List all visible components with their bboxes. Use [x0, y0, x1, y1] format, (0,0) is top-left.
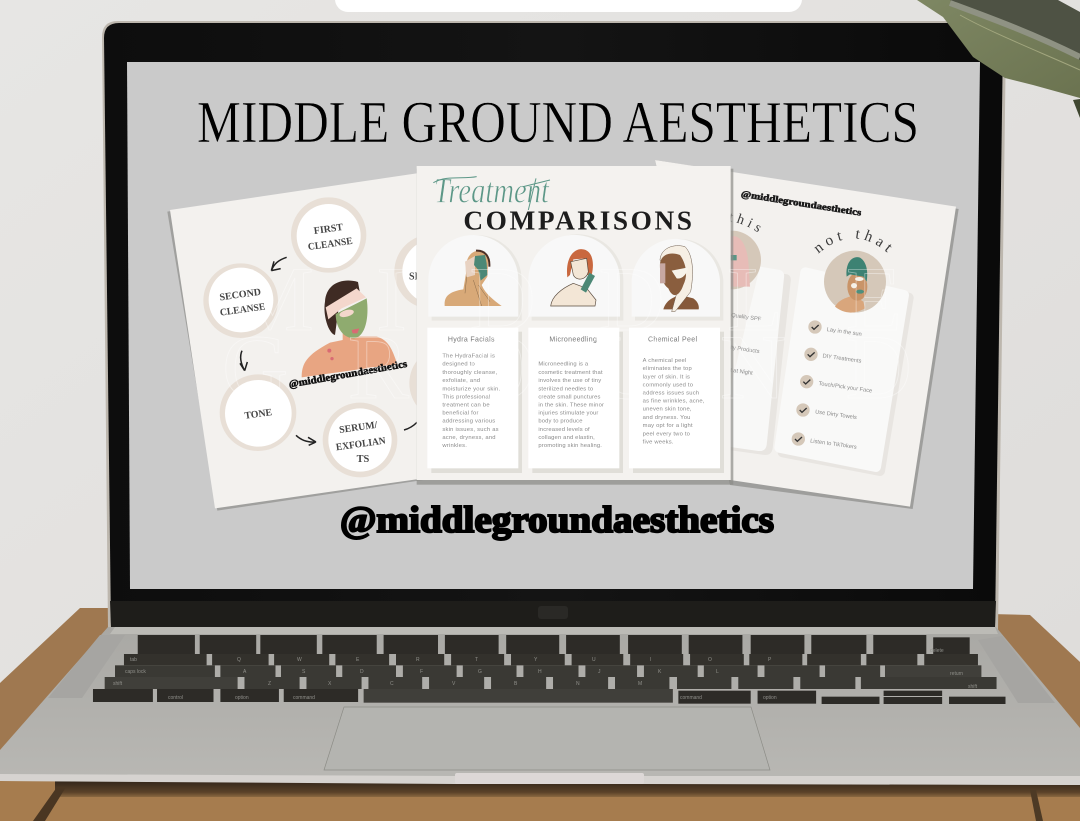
key labels: delete [930, 648, 944, 654]
text panel: microneedling: in the skin. These minor [538, 402, 604, 408]
text panel: chemical peel [629, 328, 724, 473]
laptop lid and bezel [102, 21, 1006, 630]
step: serum / exfoliants: TS [357, 454, 370, 465]
avatar: not that [824, 251, 886, 313]
key labels: T [475, 657, 478, 663]
text panel: chemical peel: may opt for a light [643, 423, 693, 429]
panel: right this-not-that card [655, 160, 959, 509]
panel: middle treatment comparisons card [417, 166, 733, 485]
plant leaf [917, 0, 1080, 118]
step: first cleanse [291, 197, 366, 273]
script heading: Treatment: Treatment [434, 171, 550, 211]
text panel: microneedling: increased levels of [538, 427, 590, 433]
text panel: chemical peel: eliminates the top [643, 366, 692, 372]
key labels: Z [268, 681, 271, 687]
check item: tiktokers: Listen to TikTokers [810, 438, 857, 451]
heading: not that: not that [814, 229, 892, 254]
text panel: chemical peel: peel every two to [643, 431, 690, 437]
text panel: microneedling: involves the use of tiny [538, 378, 601, 384]
text panel: microneedling [528, 328, 623, 473]
key labels: option [235, 695, 249, 701]
watermark: MIDDLE [232, 248, 902, 350]
white pill at top edge [335, 0, 802, 12]
handle on right card: @middlegroundaesthetics [740, 190, 862, 219]
keyboard [93, 635, 1006, 704]
thumb notch [455, 773, 644, 784]
key labels: shift [113, 681, 123, 687]
key labels: P [768, 657, 772, 663]
text panel: microneedling: cosmetic treatment that [538, 370, 603, 376]
text panel: chemical peel: layer of skin. It is [643, 374, 690, 380]
text panel: chemical peel: Chemical Peel [648, 336, 697, 343]
text panel: microneedling: body to produce [538, 419, 583, 425]
text panel: hydra facials: addressing various [442, 419, 495, 425]
step: tone: TONE [244, 407, 273, 422]
key labels: O [708, 657, 712, 663]
arrow: tone to serum [296, 435, 316, 445]
text panel: hydra facials: beneficial for [442, 411, 479, 417]
key labels: return [950, 671, 963, 677]
key labels: option [763, 695, 777, 701]
text panel: microneedling: Microneedling [549, 336, 597, 343]
key labels: L [716, 669, 719, 675]
key labels: J [598, 669, 601, 675]
title: MIDDLE GROUND AESTHETICS [197, 89, 919, 155]
text panel: hydra facials [427, 328, 522, 473]
text panel: microneedling: sterilized needles to [538, 386, 593, 392]
arrow: serum onward [404, 422, 417, 430]
key labels: U [592, 657, 596, 663]
text panel: hydra facials: skin issues, such as [442, 427, 499, 433]
step: first cleanse: CLEANSE [307, 236, 354, 253]
key labels: Y [534, 657, 538, 663]
key labels: K [658, 669, 662, 675]
key labels: shift [968, 684, 978, 690]
labels in this list: Quality SPF [731, 313, 762, 323]
trackpad [324, 707, 770, 770]
laptop base [0, 627, 1080, 785]
key labels: W [297, 657, 302, 663]
check item: DIY treatments: DIY Treatments [822, 353, 862, 365]
step: partly hidden lower circle [409, 346, 484, 421]
text panel: hydra facials: The HydraFacial is [442, 354, 495, 360]
social handle: @middlegroundaesthetics [340, 500, 774, 541]
text panel: microneedling: Microneedling is a [538, 362, 589, 368]
text panel: chemical peel: commonly used to [643, 382, 693, 388]
key labels: S [302, 669, 306, 675]
front edge [0, 774, 1080, 785]
icon: laptop logo mark [538, 606, 568, 619]
check item: touch face: Touch/Pick your Face [818, 381, 872, 395]
text panel: hydra facials: exfoliate, and [442, 378, 480, 384]
key labels: control [168, 695, 183, 701]
text panel: hydra facials: treatment can be [442, 402, 490, 408]
text panel: chemical peel: uneven skin tone, [643, 407, 692, 413]
avatar: this [702, 231, 761, 289]
key labels: D [360, 669, 364, 675]
text panel: chemical peel: as fine wrinkles, acne, [643, 399, 705, 405]
arch: chemical peel [632, 239, 723, 321]
key labels: R [416, 657, 420, 663]
step: first cleanse: FIRST [313, 222, 344, 237]
key labels: C [390, 681, 394, 687]
text panel: microneedling: collagen and elastin, [538, 435, 595, 441]
key labels [113, 648, 978, 701]
watermark: GROUND [222, 316, 912, 418]
key labels: E [356, 657, 360, 663]
key labels: H [538, 669, 542, 675]
step: serum / exfoliants: SERUM/ [339, 420, 378, 436]
text panel: microneedling: promoting skin healing. [538, 443, 602, 449]
text panel: chemical peel: address issues such [643, 391, 699, 397]
step: serum / exfoliants [323, 403, 397, 477]
arch: microneedling [528, 234, 623, 321]
text panel: chemical peel: A chemical peel [643, 358, 686, 364]
illustration: woman in green face mask [302, 281, 397, 377]
text panel: hydra facials: acne, dryness, and [442, 435, 496, 441]
step: second cleanse: SECOND [219, 287, 262, 303]
key labels: I [650, 657, 651, 663]
heading: Comparisons: COMPARISONS [463, 205, 692, 235]
step: second cleanse [203, 263, 278, 338]
text panel: hydra facials: This professional [442, 394, 490, 400]
list panel: not that [779, 272, 909, 471]
text panel: hydra facials: Hydra Facials [448, 336, 495, 343]
arrow: first to second [271, 257, 287, 271]
wooden desk [0, 608, 1080, 821]
labels in this list: ity Products [730, 345, 760, 355]
key labels: caps lock [125, 669, 146, 675]
key labels: tab [130, 657, 137, 663]
list panel: this [717, 267, 791, 455]
text panel: hydra facials: wrinkles. [441, 443, 467, 449]
handle on left card: @middlegroundaesthetics [288, 359, 408, 391]
labels in this list [730, 313, 762, 377]
check item: dirty towels: Use Dirty Towels [815, 409, 857, 421]
step: serum / exfoliants: EXFOLIAN [335, 435, 387, 453]
key labels: F [420, 669, 423, 675]
arrow: second to tone [240, 351, 247, 371]
watermark [222, 248, 912, 418]
speaker grille right [978, 636, 1055, 703]
check item: lay in the sun: Lay in the sun [826, 327, 862, 338]
step: tone [220, 374, 296, 451]
key labels: G [478, 669, 482, 675]
key labels: N [576, 681, 580, 687]
speaker grille left [48, 635, 125, 698]
step: second cleanse: CLEANSE [219, 301, 266, 319]
text panel: microneedling: injuries stimulate your [538, 411, 599, 417]
text panel: microneedling: create small punctures [538, 394, 601, 400]
key labels: M [638, 681, 642, 687]
text panel: chemical peel: five weeks. [643, 439, 674, 445]
labels in this list: t at Night [730, 368, 753, 377]
step: partly hidden circle: SI [409, 271, 419, 282]
arch: hydra facials [428, 235, 522, 321]
key labels: command [680, 695, 702, 701]
heading: this: this [730, 213, 761, 232]
text panel: hydra facials: moisturize your skin. [442, 386, 500, 392]
key labels: command [293, 695, 315, 701]
checklist [792, 320, 872, 451]
key labels: A [243, 669, 247, 675]
key labels: Q [237, 657, 241, 663]
step: partly hidden circle [394, 234, 469, 309]
text panel: hydra facials: thoroughly cleanse, [442, 370, 497, 376]
key labels: V [452, 681, 456, 687]
key labels: B [514, 681, 518, 687]
panel: left skincare routine card [167, 172, 484, 511]
text panel: chemical peel: and dryness. You [643, 415, 691, 421]
key labels: X [328, 681, 332, 687]
text panel: hydra facials: designed to [442, 362, 475, 368]
